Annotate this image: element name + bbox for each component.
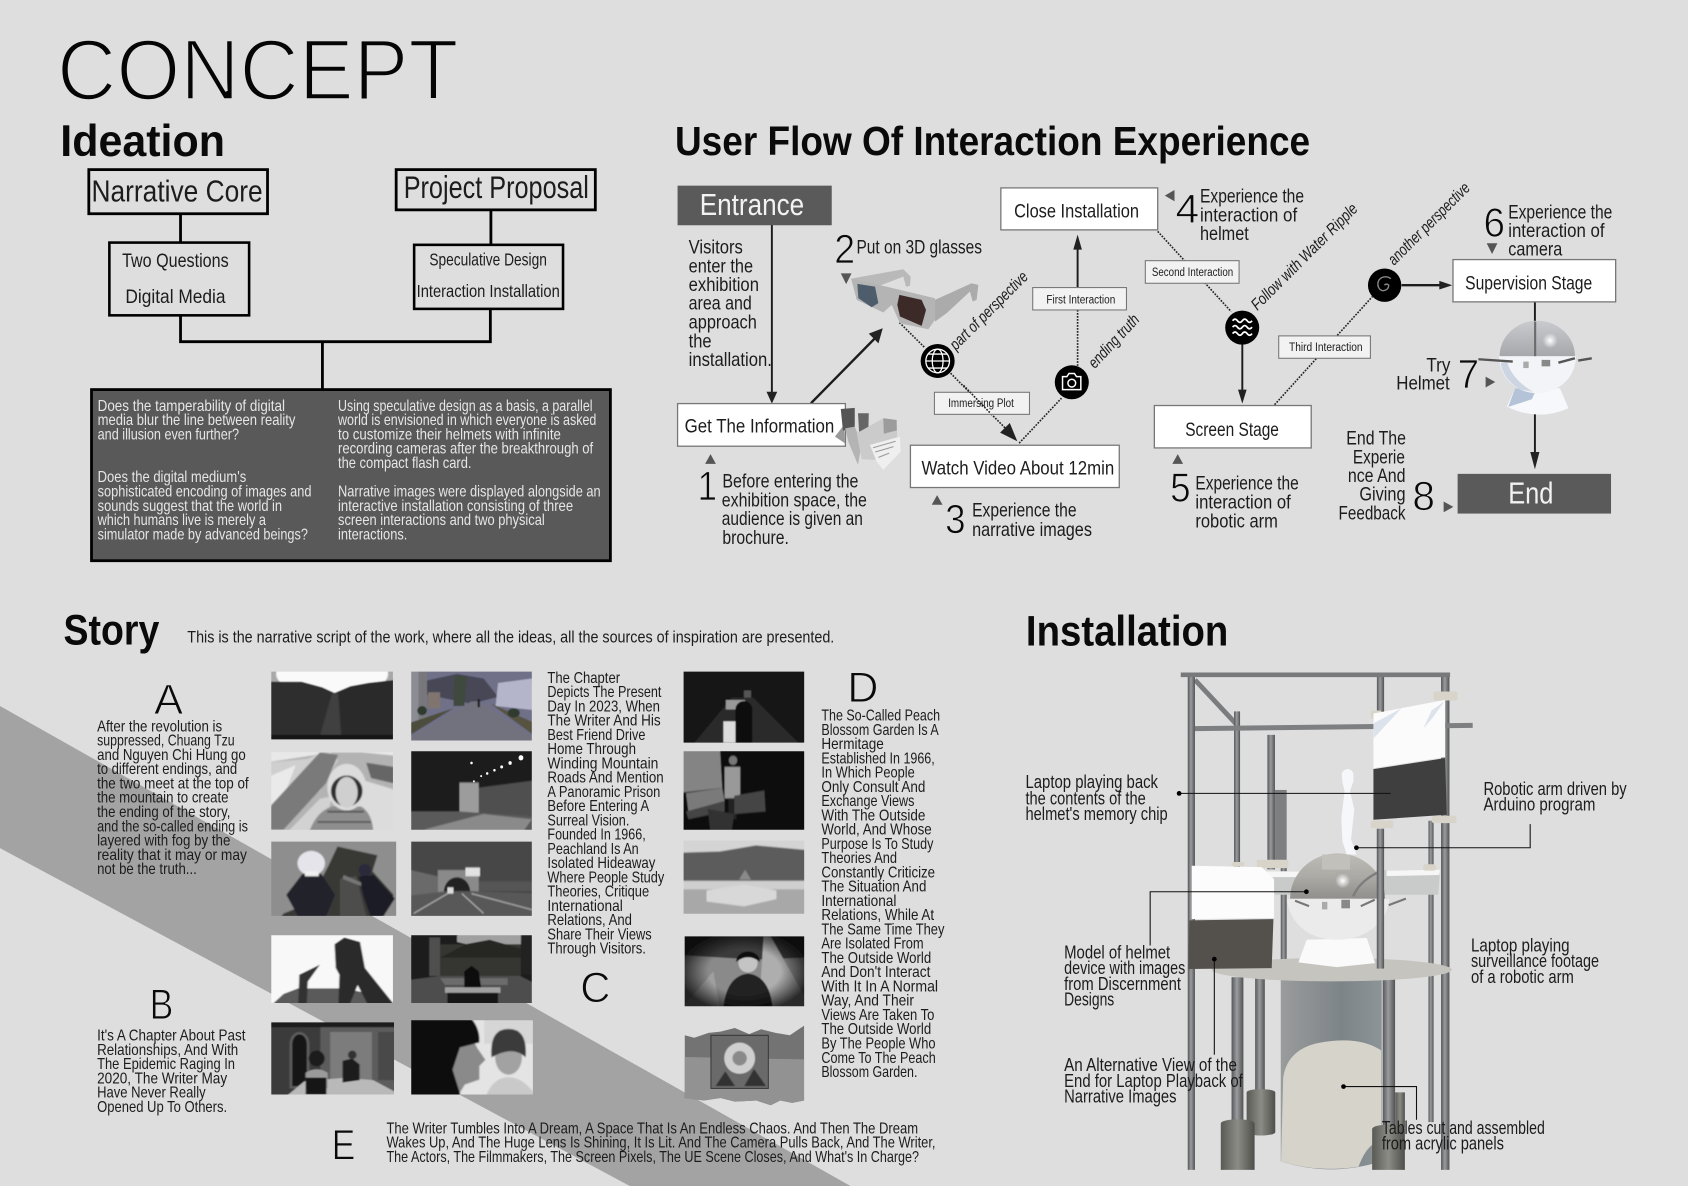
chapter D: And Don't Interact <box>821 963 931 981</box>
step 5: 5 <box>1170 465 1191 511</box>
chapter D: World, And Whose <box>821 821 932 839</box>
chapter A: suppressed, Chuang Tzu <box>97 732 235 750</box>
top right laptop <box>1373 700 1447 820</box>
chapter A: layered with fog by the <box>97 832 230 850</box>
chapter D: The Outside World <box>821 1020 931 1038</box>
dark text panel: simulator made by advanced beings? <box>98 526 308 543</box>
step 5 <box>1170 454 1299 533</box>
step 6: Experience the <box>1508 201 1612 223</box>
chapter D: Come To The Peach <box>821 1049 936 1067</box>
box: Get The Information: Get The Information <box>685 416 834 438</box>
chapter C: Surreal Vision. <box>547 811 629 829</box>
callout: laptop playing back: helmet's memory chip <box>1026 803 1168 824</box>
chapter A: not be the truth... <box>97 860 197 878</box>
diagram: installation render <box>1181 673 1473 1170</box>
chapter C: Day In 2023, When <box>547 697 660 715</box>
box: Watch Video <box>910 445 1119 488</box>
robotic arm <box>1341 769 1356 855</box>
dark text panel: screen interactions and two physical <box>338 512 545 529</box>
text: visitors: area and <box>689 293 752 315</box>
callout: alternative view: An Alternative View of the <box>1064 1054 1237 1075</box>
chapter C: Winding Mountain <box>547 754 658 772</box>
step 3: 3 <box>945 496 966 542</box>
chapter B: 2020, The Writer May <box>97 1070 228 1088</box>
callout: model of helmet: device with images <box>1064 957 1185 978</box>
heading: Installation: Installation <box>1026 608 1228 656</box>
rotated label: another perspective: another perspective <box>1384 179 1474 269</box>
chapter C: Best Friend Drive <box>547 726 645 744</box>
box: Screen Stage <box>1154 406 1311 448</box>
text: visitors <box>689 237 772 371</box>
rotated label: ending truth: ending truth <box>1085 311 1143 372</box>
chapter C: Before Entering A <box>547 797 649 815</box>
box: two questions and digital media: Two Questions <box>122 250 229 272</box>
chapter E: Wakes Up, And The Huge Lens Is Shining, It Is Lit. And The Camera Pulls Back, And The Writer, <box>386 1134 936 1152</box>
step 2: 2 <box>834 226 855 272</box>
box: Entrance <box>678 186 832 225</box>
front pole <box>1377 829 1384 969</box>
step 1: Before entering the <box>722 471 858 493</box>
box: two questions and digital media: Digital Media <box>125 286 226 308</box>
step 1 <box>698 454 867 549</box>
panel: ideation tree <box>89 170 610 561</box>
step 8 <box>1339 427 1453 524</box>
chapter B: Relationships, And With <box>97 1041 238 1059</box>
callout: alternative view <box>1064 1054 1243 1107</box>
box: Narrative Core <box>89 170 268 214</box>
icon: camera <box>1055 365 1089 399</box>
chapter E: E <box>332 1122 355 1170</box>
photo: bedroom scene <box>271 1022 394 1094</box>
label: First Interaction <box>1033 288 1126 310</box>
chapter D: D <box>847 664 878 712</box>
callout: model of helmet: Model of helmet <box>1064 941 1170 962</box>
chapter D: With It In A Normal <box>821 978 938 996</box>
chapter D: Only Consult And <box>821 778 925 796</box>
chapter C: Home Through <box>547 740 636 758</box>
callout: tables: from acrylic panels <box>1382 1133 1504 1154</box>
step 1: audience is given an <box>722 508 863 530</box>
title: CONCEPT <box>57 23 459 119</box>
icon: globe <box>921 344 955 378</box>
step 1: exhibition space, the <box>722 490 867 512</box>
chapter B: Have Never Really <box>97 1084 206 1102</box>
chapter D: International <box>821 892 896 910</box>
callout: surveillance laptop: of a robotic arm <box>1471 966 1574 987</box>
callout: robotic arm: Robotic arm driven by <box>1483 778 1627 799</box>
step 3: Experience the <box>972 500 1077 522</box>
rotated label: Follow with Water Ripple: Follow with Water Ripple <box>1247 200 1361 314</box>
chapter D: Views Are Taken To <box>821 1006 934 1024</box>
callout: alternative view: End for Laptop Playback of <box>1064 1070 1243 1091</box>
callout: model of helmet <box>1064 941 1185 1010</box>
chapter D: Are Isolated From <box>821 935 924 953</box>
helmet model <box>1287 853 1406 967</box>
step 6: 6 <box>1483 200 1505 246</box>
chapter C: The Writer And His <box>547 712 661 730</box>
step 6 <box>1483 200 1612 261</box>
chapter B <box>97 981 246 1116</box>
step 5: robotic arm <box>1195 511 1278 533</box>
dark text panel: Does the digital medium's <box>98 469 246 486</box>
rotated label: part of perspective: part of perspective <box>946 268 1032 354</box>
label: Immersing Plot: Immersing Plot <box>948 396 1014 410</box>
chapter B: Opened Up To Others. <box>97 1098 227 1116</box>
dark text panel: interactions. <box>338 526 407 543</box>
dark text panel: sounds suggest that the world in <box>98 498 282 515</box>
callout: model of helmet: Designs <box>1064 989 1114 1010</box>
chapter A: the two meet at the top of <box>97 774 249 792</box>
step 1: 1 <box>698 463 717 509</box>
label: Second Interaction: Second Interaction <box>1152 265 1233 279</box>
chapter A <box>97 676 249 878</box>
callout: tables <box>1382 1117 1545 1154</box>
chapter D: The So-Called Peach <box>821 707 940 725</box>
photo: silhouette on white <box>271 935 393 1003</box>
callout: tables: Tables cut and assembled <box>1382 1117 1545 1138</box>
chapter C: C <box>580 964 610 1012</box>
chapter D: Constantly Criticize <box>821 863 935 881</box>
chapter D: In Which People <box>821 764 915 782</box>
chapter D: Way, And Their <box>821 992 915 1010</box>
chapter D: Purpose Is To Study <box>821 835 934 853</box>
step 4 <box>1165 186 1304 245</box>
chapter D: The Situation And <box>821 878 926 896</box>
chapter C: Relations, And <box>547 911 632 929</box>
box: speculative design and interaction installation: Interaction Installation <box>417 281 560 301</box>
step 4: Experience the <box>1200 186 1304 208</box>
step 2: Put on 3D glasses <box>856 237 982 259</box>
callout: robotic arm <box>1483 778 1627 815</box>
dark text panel: Using speculative design as a basis, a parallel <box>338 398 593 415</box>
panel: user flow diagram <box>678 179 1616 549</box>
left laptop <box>1188 866 1274 969</box>
box: Screen Stage: Screen Stage <box>1185 419 1279 441</box>
box: Get The Information <box>678 404 845 446</box>
dark text panel: recording cameras after the breakthrough of <box>338 441 594 458</box>
icon: water ripple <box>1225 311 1259 345</box>
chapter E: The Writer Tumbles Into A Dream, A Space That Is An Endless Chaos. And Then The Dream <box>386 1119 918 1137</box>
dark text panel: to customize their helmets with infinite <box>338 426 561 443</box>
chapter D: Theories And <box>821 849 897 867</box>
box: Supervision Stage: Supervision Stage <box>1465 273 1592 295</box>
step 8: Experie <box>1353 446 1405 468</box>
photo: sculpture in field with torn edges <box>684 1026 804 1106</box>
chapter C: International <box>547 897 623 915</box>
chapter D: The Same Time They <box>821 920 945 938</box>
dark text panel: interactive installation consisting of three <box>338 498 573 515</box>
dark text panel: which humans live is merely a <box>97 512 266 529</box>
photo: night figure with light <box>684 672 804 743</box>
chapter A: and the so-called ending is <box>97 817 248 835</box>
step 8: nce And <box>1348 465 1406 487</box>
chapter E <box>332 1119 936 1170</box>
box: Watch Video: Watch Video About 12min <box>922 458 1114 480</box>
callout: laptop playing back: Laptop playing back <box>1026 771 1159 792</box>
icon: spiral lens <box>1368 269 1401 302</box>
flow lines and arrows <box>766 225 1539 469</box>
chapter C: Isolated Hideaway <box>547 854 656 872</box>
heading: user flow: User Flow Of Interaction Experience <box>675 118 1310 164</box>
step 1: brochure. <box>722 527 789 549</box>
box: End: End <box>1508 478 1553 511</box>
box: Supervision Stage <box>1453 260 1616 302</box>
photo: dusk road <box>411 672 532 740</box>
box: Project Proposal: Project Proposal <box>404 170 589 205</box>
chapter D: With The Outside <box>821 806 925 824</box>
chapter C: Founded In 1966, <box>547 826 646 844</box>
step 7: 7 <box>1458 351 1479 397</box>
chapter A: to different endings, and <box>97 760 237 778</box>
chapter C: Roads And Mention <box>547 769 664 787</box>
step 5: Experience the <box>1195 473 1299 495</box>
box: speculative design and interaction installation: Speculative Design <box>429 250 547 270</box>
box: two questions and digital media <box>109 243 249 315</box>
callout: surveillance laptop: Laptop playing <box>1471 934 1570 955</box>
chapter A: and Nguyen Chi Hung go <box>97 746 246 764</box>
label: First Interaction: First Interaction <box>1046 292 1115 306</box>
chapter C <box>547 669 665 1012</box>
chapter B: The Epidemic Raging In <box>97 1055 235 1073</box>
text: visitors: approach <box>689 312 757 334</box>
photo: installation in landscape <box>684 840 804 914</box>
photo: man with clapperboard <box>684 751 804 830</box>
step 8: End The <box>1346 427 1406 449</box>
chapter C: Theories, Critique <box>547 883 649 901</box>
diagonal grey band <box>0 706 850 1186</box>
step 7: Try <box>1426 355 1451 377</box>
clamps <box>1232 691 1458 871</box>
heading: Story: Story <box>64 607 159 655</box>
chapter D: Blossom Garden Is A <box>821 721 939 739</box>
chapter D <box>821 664 945 1081</box>
chapter C: Peachland Is An <box>547 840 639 858</box>
chapter C: Share Their Views <box>547 926 652 944</box>
text: visitors: enter the <box>689 255 753 277</box>
text: visitors: the <box>689 330 712 352</box>
step 8: Feedback <box>1339 502 1406 524</box>
weights <box>1221 1089 1405 1170</box>
step 6: camera <box>1508 239 1562 261</box>
box: Close Installation <box>1001 188 1158 230</box>
dark text panel: Does the tamperability of digital <box>98 398 285 415</box>
chapter C: Through Visitors. <box>547 940 646 958</box>
dark text panel: sophisticated encoding of images and <box>98 484 311 501</box>
chapter A: the ending of the story, <box>97 803 230 821</box>
label: Third Interaction <box>1279 336 1370 358</box>
photo: rabbit astronaut <box>271 752 393 830</box>
chapter C: The Chapter <box>547 669 621 687</box>
callouts: installation leader lines <box>1150 791 1530 1120</box>
box: Narrative Core: Narrative Core <box>92 175 263 208</box>
dark text panel: world is envisioned in which everyone is asked <box>337 412 596 429</box>
box: Entrance: Entrance <box>700 189 804 222</box>
callout: model of helmet: from Discernment <box>1064 973 1181 994</box>
step 8: 8 <box>1412 473 1435 519</box>
dark text panel <box>92 390 610 561</box>
step 3: narrative images <box>972 519 1092 541</box>
chapter E: The Actors, The Filmmakers, The Screen Pixels, The UE Scene Closes, And What's In Charge? <box>386 1148 919 1166</box>
dark text panel: media blur the line between reality <box>98 412 296 429</box>
chapter D: The Outside World <box>821 949 931 967</box>
heading: Ideation: Ideation <box>60 117 225 166</box>
step 7 <box>1396 351 1495 397</box>
callout: surveillance laptop: surveillance footage <box>1471 950 1599 971</box>
photo: figures by rock <box>271 842 396 916</box>
step 6: interaction of <box>1508 220 1605 242</box>
step 4: interaction of <box>1200 204 1298 226</box>
dark text panel: and illusion even further? <box>98 426 239 443</box>
icon: brochure <box>835 408 901 470</box>
icon: 3D glasses <box>851 269 978 329</box>
chapter D: By The People Who <box>821 1035 936 1053</box>
table top <box>1212 958 1452 981</box>
icon: helmet model <box>1478 321 1592 415</box>
chapter A: A <box>154 676 183 724</box>
photo: smiling man portrait <box>684 936 804 1006</box>
text: visitors: installation. <box>689 349 772 371</box>
chapter B: B <box>150 981 173 1029</box>
photo: tunnel lights <box>411 751 532 830</box>
photo: room with table <box>411 935 532 1003</box>
tree connectors <box>181 210 491 389</box>
base cylinder <box>1281 979 1382 1169</box>
step 8: Giving <box>1359 484 1406 506</box>
callout: robotic arm: Arduino program <box>1483 794 1595 815</box>
chapter A: reality that it may or may <box>97 846 248 864</box>
photo: tunnel entrance <box>411 842 532 916</box>
chapter A: After the revolution is <box>97 717 222 735</box>
chapter A: the mountain to create <box>97 789 229 807</box>
story intro: This is the narrative script of the work, where all the ideas, all the sources of inspiration are presented. <box>187 628 834 647</box>
back frame poles <box>1181 673 1473 1170</box>
box: speculative design and interaction installation <box>414 245 563 309</box>
label: Second Interaction <box>1145 261 1239 283</box>
step 4: 4 <box>1176 186 1199 232</box>
label: Immersing Plot <box>934 385 1029 414</box>
shelf <box>1262 870 1440 895</box>
callout: laptop playing back <box>1026 771 1168 824</box>
step 5: interaction of <box>1195 492 1291 514</box>
text: visitors: exhibition <box>689 274 759 296</box>
step 7: Helmet <box>1396 373 1450 395</box>
photo: close-up faces <box>411 1020 533 1094</box>
step 2 <box>834 226 982 284</box>
callout: laptop playing back: the contents of the <box>1026 787 1146 808</box>
step 4: helmet <box>1200 223 1249 245</box>
text: visitors: Visitors <box>689 237 743 259</box>
chapter C: Where People Study <box>547 869 665 887</box>
chapter C: Depicts The Present <box>547 683 662 701</box>
label: Third Interaction: Third Interaction <box>1289 340 1363 354</box>
box: Close Installation: Close Installation <box>1014 200 1139 222</box>
chapter D: Relations, While At <box>821 906 935 924</box>
photo: dark valley <box>271 672 393 740</box>
chapter C: A Panoramic Prison <box>547 783 660 801</box>
box: End <box>1458 474 1611 514</box>
chapter D: Hermitage <box>821 735 884 753</box>
step 3 <box>932 495 1092 542</box>
dark text panel: Narrative images were displayed alongside an <box>338 484 601 501</box>
callout: alternative view: Narrative Images <box>1064 1086 1177 1107</box>
dark text panel: the compact flash card. <box>338 455 472 472</box>
chapter D: Exchange Views <box>821 792 914 810</box>
chapter D: Blossom Garden. <box>821 1063 917 1081</box>
chapter D: Established In 1966, <box>821 749 935 767</box>
chapter B: It's A Chapter About Past <box>97 1027 246 1045</box>
callout: surveillance laptop <box>1471 934 1599 987</box>
